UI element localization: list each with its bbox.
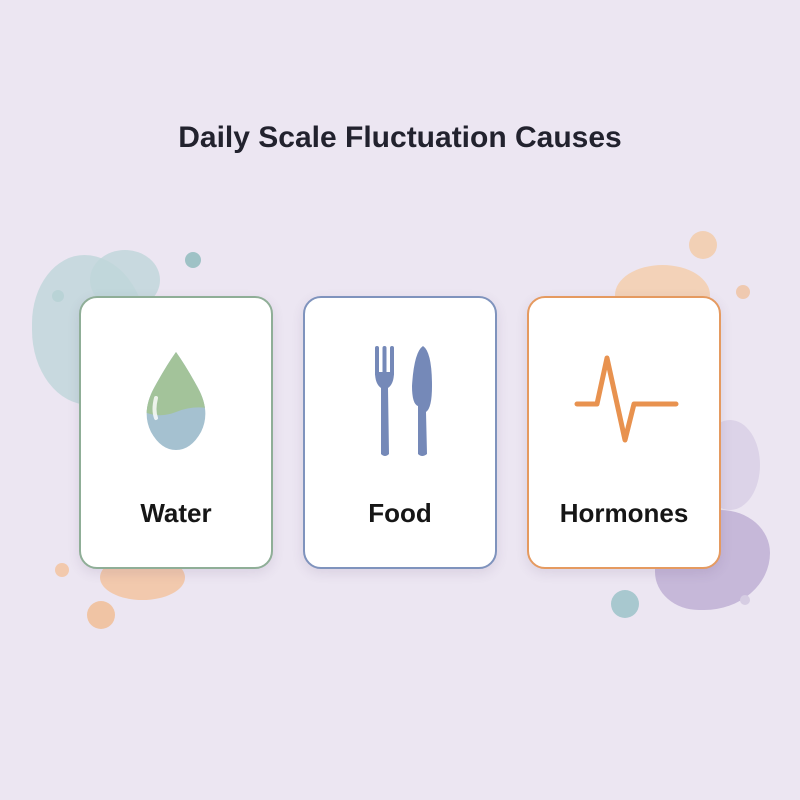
- panel: food: [303, 296, 497, 569]
- icon: water drop: [146, 352, 206, 450]
- icon: pulse line: [574, 356, 678, 442]
- title: Daily Scale Fluctuation Causes: [178, 121, 622, 154]
- label: hormones: Hormones: [560, 498, 688, 528]
- icon: fork and knife: [375, 346, 432, 456]
- label: food: Food: [368, 498, 432, 528]
- panel: hormones: [527, 296, 721, 569]
- panel: water: [79, 296, 273, 569]
- label: water: Water: [140, 498, 212, 528]
